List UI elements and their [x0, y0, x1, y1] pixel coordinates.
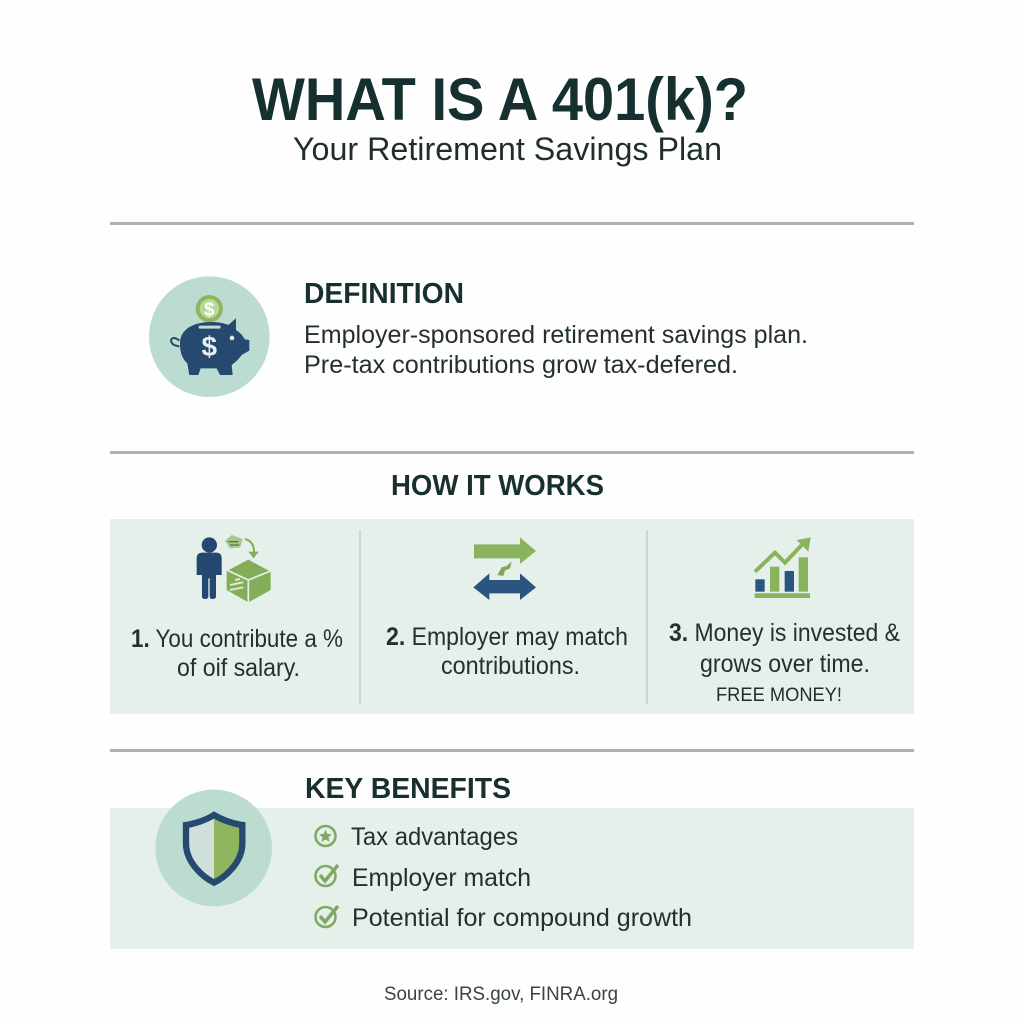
icon: person and box: [197, 535, 271, 602]
benefit: tax advantages: Tax advantages: [351, 823, 518, 851]
icon: piggy bank: [149, 276, 270, 397]
icon: piggy bank: $: [204, 298, 215, 319]
step 1: [131, 535, 343, 682]
definition text: [304, 321, 808, 379]
step 2: [386, 537, 628, 680]
step 3 text: [669, 619, 900, 706]
step 1 text: of oif salary.: [177, 654, 300, 682]
step 2 text: [386, 623, 628, 680]
icon: growth chart: [755, 537, 811, 598]
benefit: compound growth: Potential for compound growth: [352, 904, 692, 932]
icon: piggy bank: $: [202, 331, 218, 362]
step 1 text: 1. You contribute a %: [131, 625, 343, 653]
title: WHAT IS A 401(k)?: [252, 66, 748, 133]
benefit: employer match: Employer match: [352, 864, 531, 892]
icon: shield: [155, 790, 272, 906]
step 3 text: grows over time.: [700, 650, 870, 678]
subtitle: Your Retirement Savings Plan: [293, 131, 722, 167]
step 3 text: FREE MONEY!: [716, 685, 842, 706]
step 1 text: [131, 625, 343, 682]
definition text: Pre-tax contributions grow tax-defered.: [304, 351, 738, 379]
definition text: Employer-sponsored retirement savings plan.: [304, 321, 808, 349]
step 3 text: 3. Money is invested &: [669, 619, 900, 647]
panel: definition: [149, 276, 808, 397]
step 2 text: 2. Employer may match: [386, 623, 628, 651]
heading: definition: DEFINITION: [304, 278, 464, 310]
heading: how it works: HOW IT WORKS: [391, 470, 604, 502]
step 2 text: contributions.: [441, 652, 580, 680]
heading: key benefits: KEY BENEFITS: [305, 773, 511, 805]
source: Source: IRS.gov, FINRA.org: [384, 984, 618, 1005]
step 3: [669, 537, 900, 706]
panel: key benefits: [110, 773, 914, 949]
panel: how it works: [110, 519, 914, 714]
icon: exchange arrows: [473, 537, 536, 600]
